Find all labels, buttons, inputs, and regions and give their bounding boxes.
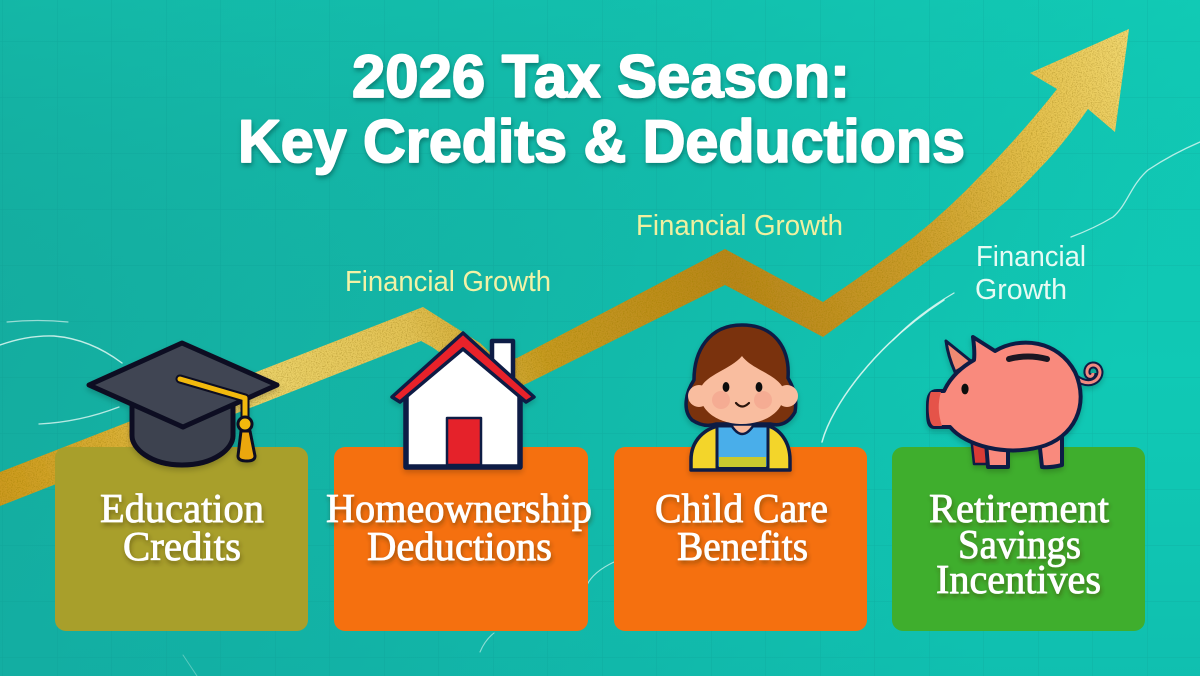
decorative white curves [0, 142, 1200, 676]
icon: house [392, 333, 534, 467]
retirement label: Retirement [929, 485, 1110, 531]
label: financial growth 3: Growth [975, 274, 1067, 306]
rising gold arrow [0, 29, 1129, 506]
retirement label [929, 485, 1110, 602]
panel: child care benefits [614, 447, 867, 631]
icon: child [686, 325, 798, 470]
panel: education credits [55, 447, 308, 631]
homeownership label [326, 485, 592, 569]
title: 2026 Tax Season: [352, 43, 850, 110]
education label: Education [100, 485, 264, 531]
label: financial growth 1: Financial Growth [345, 266, 551, 298]
label: financial growth 2: Financial Growth [636, 210, 843, 242]
retirement label: Savings [958, 521, 1081, 567]
title: Key Credits & Deductions [238, 108, 965, 175]
education label: Credits [123, 523, 241, 569]
title [238, 43, 965, 175]
panel: homeownership deductions [326, 447, 592, 631]
icon: graduation cap [89, 343, 277, 465]
homeownership label: Deductions [367, 523, 552, 569]
homeownership label: Homeownership [326, 485, 592, 531]
panel: retirement savings incentives [892, 447, 1145, 631]
child care label: Child Care [655, 485, 828, 531]
education label [100, 485, 264, 569]
icon: piggy bank [928, 337, 1100, 467]
label: financial growth 3 [975, 241, 1086, 306]
child care label: Benefits [677, 523, 808, 569]
label: financial growth 3: Financial [976, 241, 1086, 273]
child care label [655, 485, 828, 569]
retirement label: Incentives [936, 556, 1101, 602]
